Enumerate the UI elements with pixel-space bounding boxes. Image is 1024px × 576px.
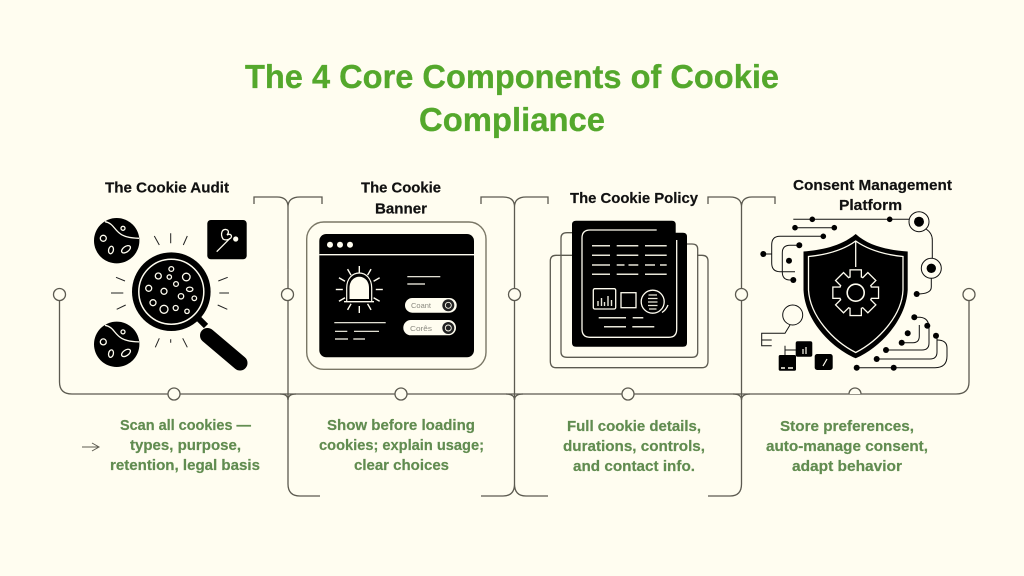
title: The 4 Core Components of Cookie	[245, 58, 779, 95]
heading: The Cookie Audit: The Cookie Audit	[105, 180, 229, 196]
icon: circuit lines	[760, 212, 947, 371]
text: audit description: retention, legal basis	[110, 457, 260, 474]
timeline connector	[54, 197, 975, 496]
icon: magnifier rays	[111, 233, 229, 347]
icon: shield	[804, 234, 908, 358]
icon: mini square	[621, 293, 636, 308]
text: audit description: Scan all cookies —	[120, 417, 251, 434]
text: policy description: and contact info.	[573, 458, 695, 475]
icon: small dark tiles	[779, 341, 833, 371]
text: banner description: clear choices	[354, 457, 449, 474]
icon: cookie circle top	[94, 218, 139, 263]
text: consent platform description: auto-manage consent,	[766, 438, 928, 455]
text: banner description: Show before loading	[327, 417, 475, 434]
icon: mini bar chart	[593, 289, 616, 309]
text: policy description	[563, 418, 705, 475]
icon: magnifying glass audit	[94, 218, 247, 367]
text: consent platform description: Store preferences,	[780, 418, 914, 435]
text: audit description: types, purpose,	[130, 437, 241, 454]
icon: cookie policy document	[550, 221, 708, 368]
icon: tool square	[207, 220, 247, 259]
icon: gear	[834, 270, 878, 315]
toggle: Cores	[403, 320, 456, 335]
text: banner description: cookies; explain usage;	[319, 437, 484, 454]
icon: cookie circle bottom	[94, 322, 139, 367]
title	[245, 58, 779, 138]
icon: sun dome	[336, 266, 383, 313]
toggle: Cores: Corês	[410, 324, 432, 333]
heading: The Cookie Banner	[361, 180, 441, 218]
icon: magnifier lens	[132, 252, 240, 363]
toggle: Coant	[405, 298, 457, 313]
heading: The Cookie Policy: The Cookie Policy	[570, 190, 699, 207]
title: Compliance	[419, 101, 605, 138]
heading: The Cookie Banner: Banner	[375, 200, 427, 218]
icon: mini gauge	[641, 290, 668, 313]
text: consent platform description	[766, 418, 928, 475]
arrow	[82, 443, 99, 451]
icon: shield with gear and circuits	[760, 212, 947, 371]
text: policy description: Full cookie details,	[567, 418, 701, 435]
text: consent platform description: adapt behavior	[792, 458, 902, 475]
icon: cookie banner window	[307, 222, 486, 369]
text: audit description	[110, 417, 260, 474]
text: policy description: durations, controls,	[563, 438, 705, 455]
heading: Consent Management Platform: Consent Management	[793, 177, 952, 194]
heading: The Cookie Banner: The Cookie	[361, 180, 441, 196]
heading: Consent Management Platform: Platform	[839, 197, 902, 214]
text: banner description	[319, 417, 484, 474]
heading: Consent Management Platform	[793, 177, 952, 214]
toggle: Coant: Coant	[411, 301, 432, 310]
